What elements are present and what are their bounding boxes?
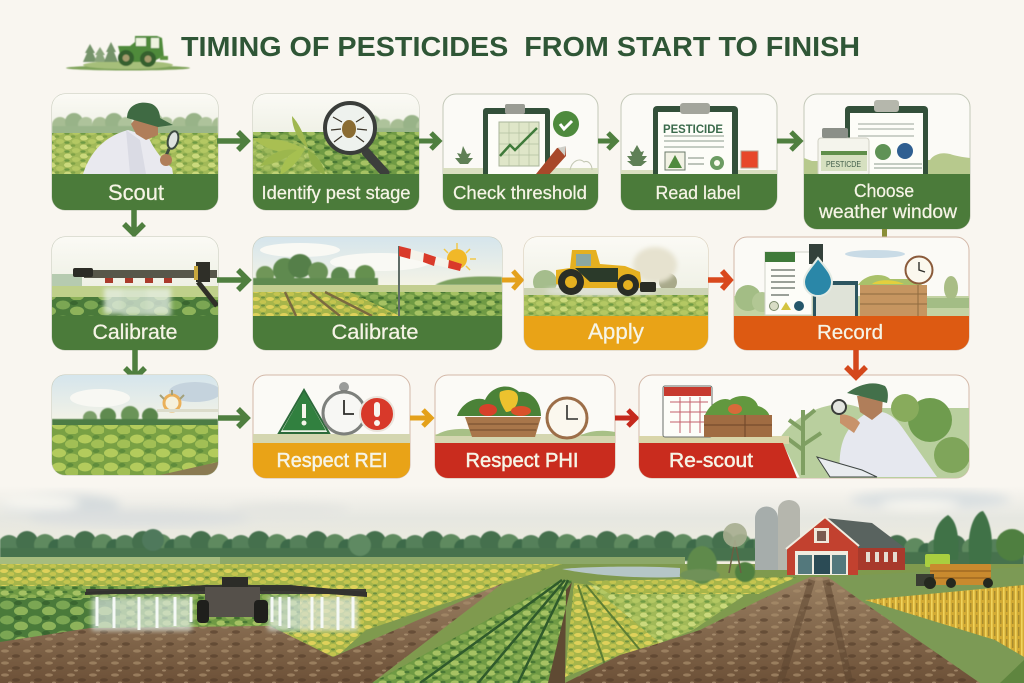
bushes xyxy=(680,546,755,584)
panel: Apply xyxy=(524,237,708,350)
panel: Record xyxy=(734,237,969,350)
arrow: Windsock panel to Apply xyxy=(502,271,521,289)
yellow rows xyxy=(565,583,660,677)
panel: Respect REI xyxy=(253,375,410,478)
back fields xyxy=(0,557,685,575)
arrow: Apply to Record xyxy=(708,271,730,289)
panel: Calibrate field with windsock xyxy=(253,237,502,350)
soil strip xyxy=(548,582,572,683)
tree line xyxy=(0,511,1024,565)
panel: Calibrate sprayer xyxy=(52,237,218,350)
pond xyxy=(562,567,680,578)
panel: Scout: Scout xyxy=(108,180,164,205)
panel: Respect PHI: Respect PHI xyxy=(466,450,578,472)
panel: Respect REI: Respect REI xyxy=(276,450,388,472)
sky xyxy=(0,486,1024,566)
arrow: field photo to REI xyxy=(218,409,247,427)
panel: Apply: Apply xyxy=(588,319,644,344)
logo: tractor and trees xyxy=(66,36,190,70)
panel: Choose weather window xyxy=(804,94,970,229)
arrow: Scout to Calibrate xyxy=(124,210,144,234)
panel: Scout xyxy=(52,94,218,210)
panel: Calibrate field with windsock: Calibrate xyxy=(332,321,418,344)
right fields xyxy=(820,567,1024,683)
panel: Check threshold xyxy=(443,94,598,210)
center green rows xyxy=(372,580,572,683)
arrow: PHI to Re-scout xyxy=(615,410,636,426)
arrow: Threshold to Label xyxy=(598,133,616,149)
panel: Respect PHI xyxy=(435,375,615,478)
panel: Check threshold: Check threshold xyxy=(453,182,587,203)
panel: Read label: PESTICIDE xyxy=(663,124,723,136)
ground base xyxy=(0,564,1024,683)
arrow: Identify to Threshold xyxy=(419,133,439,149)
panel: Record: Record xyxy=(817,321,883,344)
arrow: Scout to Identify xyxy=(217,132,247,150)
trailer xyxy=(916,554,993,589)
windmill xyxy=(723,523,747,573)
title: TIMING OF PESTICIDES FROM START TO FINISH xyxy=(181,31,860,62)
arrow: Calibrate to field photo xyxy=(125,350,145,378)
panel: Read label xyxy=(621,94,777,210)
panel: Choose weather window: PESTICDE xyxy=(826,160,861,169)
connector: Weather to Record xyxy=(882,229,887,238)
panel: field photo with sun xyxy=(52,375,221,475)
panel: farm landscape xyxy=(0,486,1024,683)
panel: Choose weather window: weather window xyxy=(818,201,958,223)
mid crop xyxy=(590,585,760,643)
sprayer xyxy=(85,577,367,631)
panel: Re-scout: Re-scout xyxy=(669,450,753,472)
panel: Identify pest stage: Identify pest stage xyxy=(262,182,410,203)
arrow: Calibrate to Windsock panel xyxy=(217,270,248,290)
arrow: Label to Weather xyxy=(777,132,800,150)
road xyxy=(565,577,980,683)
panel: Choose weather window: Choose xyxy=(854,180,914,201)
panel: Re-scout xyxy=(639,375,970,478)
arrow: Record to Re-scout xyxy=(846,350,866,377)
barn xyxy=(786,517,905,575)
panel: Read label: Read label xyxy=(656,182,740,203)
arrow: REI to PHI xyxy=(410,410,431,426)
panel: Identify pest stage xyxy=(253,94,420,210)
left crop field xyxy=(0,564,562,660)
silos xyxy=(755,500,800,570)
left soil xyxy=(0,583,503,683)
panel: Calibrate sprayer: Calibrate xyxy=(92,321,178,344)
